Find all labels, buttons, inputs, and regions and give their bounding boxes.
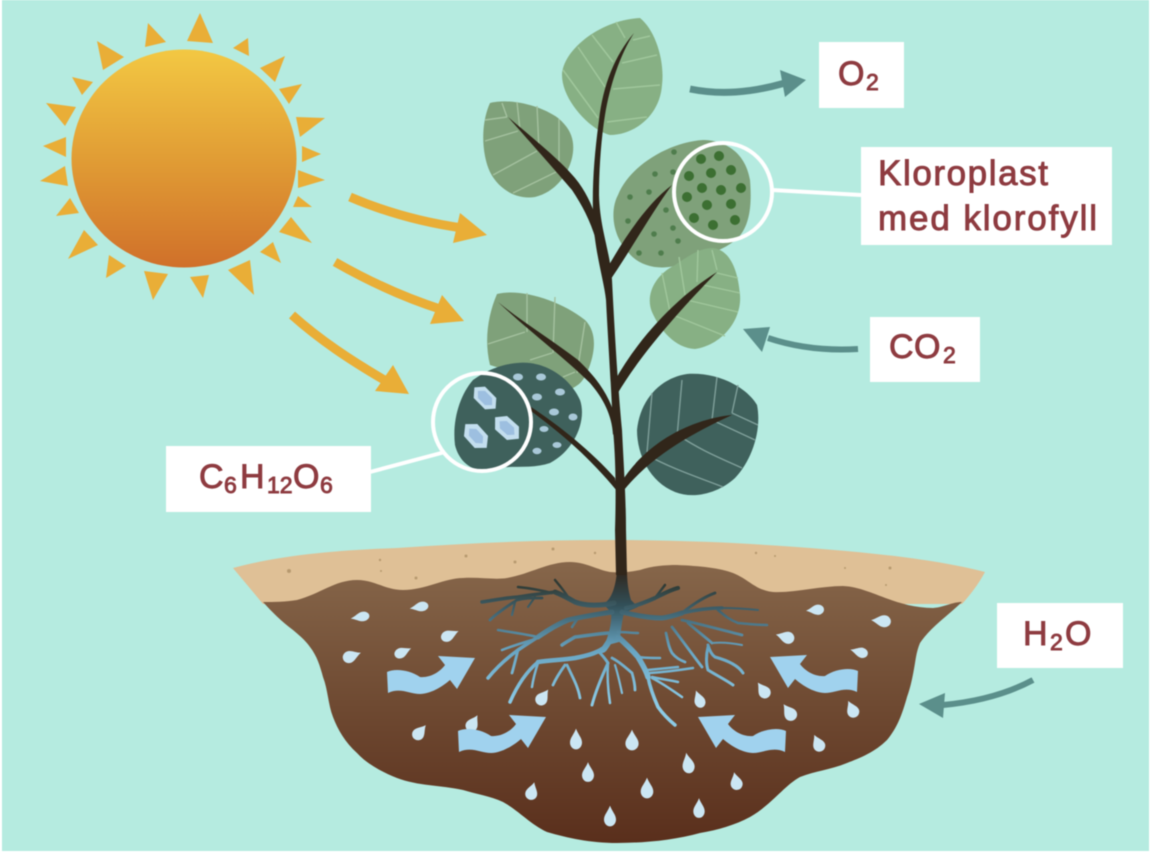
arrow: carbon dioxide in bbox=[743, 327, 858, 352]
label: glucose formula: O bbox=[293, 458, 319, 496]
sand surface layer bbox=[233, 540, 985, 604]
sunlight arrows bbox=[292, 197, 487, 394]
arrow: water in bbox=[919, 680, 1033, 718]
magnifier ring and leader line bbox=[370, 373, 531, 472]
plant bbox=[454, 18, 758, 575]
chloroplast dots bbox=[682, 151, 746, 230]
arrow: water into roots, lower left bbox=[458, 715, 546, 753]
soil body bbox=[263, 562, 962, 843]
glucose crystals bbox=[459, 382, 525, 454]
label: O2: 2 bbox=[866, 69, 879, 95]
arrow: water into roots, lower right bbox=[698, 715, 786, 753]
label: O2: O bbox=[838, 55, 864, 93]
label: CO2: C bbox=[889, 328, 914, 366]
arrow: sunlight 1 bbox=[350, 197, 487, 243]
label: CO2: 2 bbox=[943, 342, 956, 368]
leaf: upper left bbox=[483, 101, 573, 197]
label: glucose formula bbox=[166, 446, 371, 512]
leaf: chloroplast leaf bbox=[613, 140, 751, 267]
label: chloroplast with chlorophyll bbox=[861, 147, 1112, 245]
sun rays bbox=[40, 13, 325, 300]
magnifier: glucose bbox=[370, 373, 531, 472]
label: chloroplast with chlorophyll: med klorofyll bbox=[878, 199, 1097, 238]
small glucose dots bbox=[513, 374, 578, 454]
label: CO2 bbox=[870, 317, 980, 382]
label: O2 bbox=[819, 42, 904, 108]
label: glucose formula: H bbox=[240, 458, 265, 496]
small chloroplast dots bbox=[625, 149, 681, 256]
soil cross-section bbox=[233, 540, 985, 843]
sun bbox=[40, 13, 325, 300]
arrow: water into roots, upper left bbox=[387, 656, 475, 694]
label: glucose formula: 6 bbox=[320, 472, 333, 498]
stem and branches bbox=[498, 33, 732, 575]
root trunk bbox=[603, 570, 638, 646]
label: glucose formula: 6 bbox=[224, 472, 237, 498]
leaf: right middle bbox=[650, 248, 740, 349]
roots bbox=[482, 570, 767, 725]
arrow: oxygen out bbox=[690, 70, 806, 97]
label: CO2: O bbox=[914, 328, 940, 366]
leaf: lower left bbox=[487, 292, 594, 390]
leaf: lower right dark bbox=[637, 374, 758, 495]
label: H2O bbox=[997, 603, 1123, 668]
magnifier ring and leader line bbox=[674, 143, 861, 241]
label: chloroplast with chlorophyll: Kloroplast bbox=[878, 154, 1048, 193]
arrow: sunlight 2 bbox=[335, 262, 464, 324]
leaf: top bbox=[562, 18, 663, 135]
sun disc bbox=[72, 50, 296, 268]
label: H2O: O bbox=[1065, 615, 1091, 653]
water droplets bbox=[341, 601, 891, 826]
arrow: water into roots, upper right bbox=[770, 655, 858, 693]
label: H2O: 2 bbox=[1050, 629, 1063, 655]
leaf: glucose leaf bbox=[454, 363, 582, 470]
label: glucose formula: C bbox=[199, 458, 224, 496]
label: glucose formula: 12 bbox=[267, 472, 293, 498]
label: H2O: H bbox=[1023, 615, 1048, 653]
arrow: sunlight 3 bbox=[292, 315, 409, 394]
magnifier: chloroplast bbox=[674, 143, 861, 241]
